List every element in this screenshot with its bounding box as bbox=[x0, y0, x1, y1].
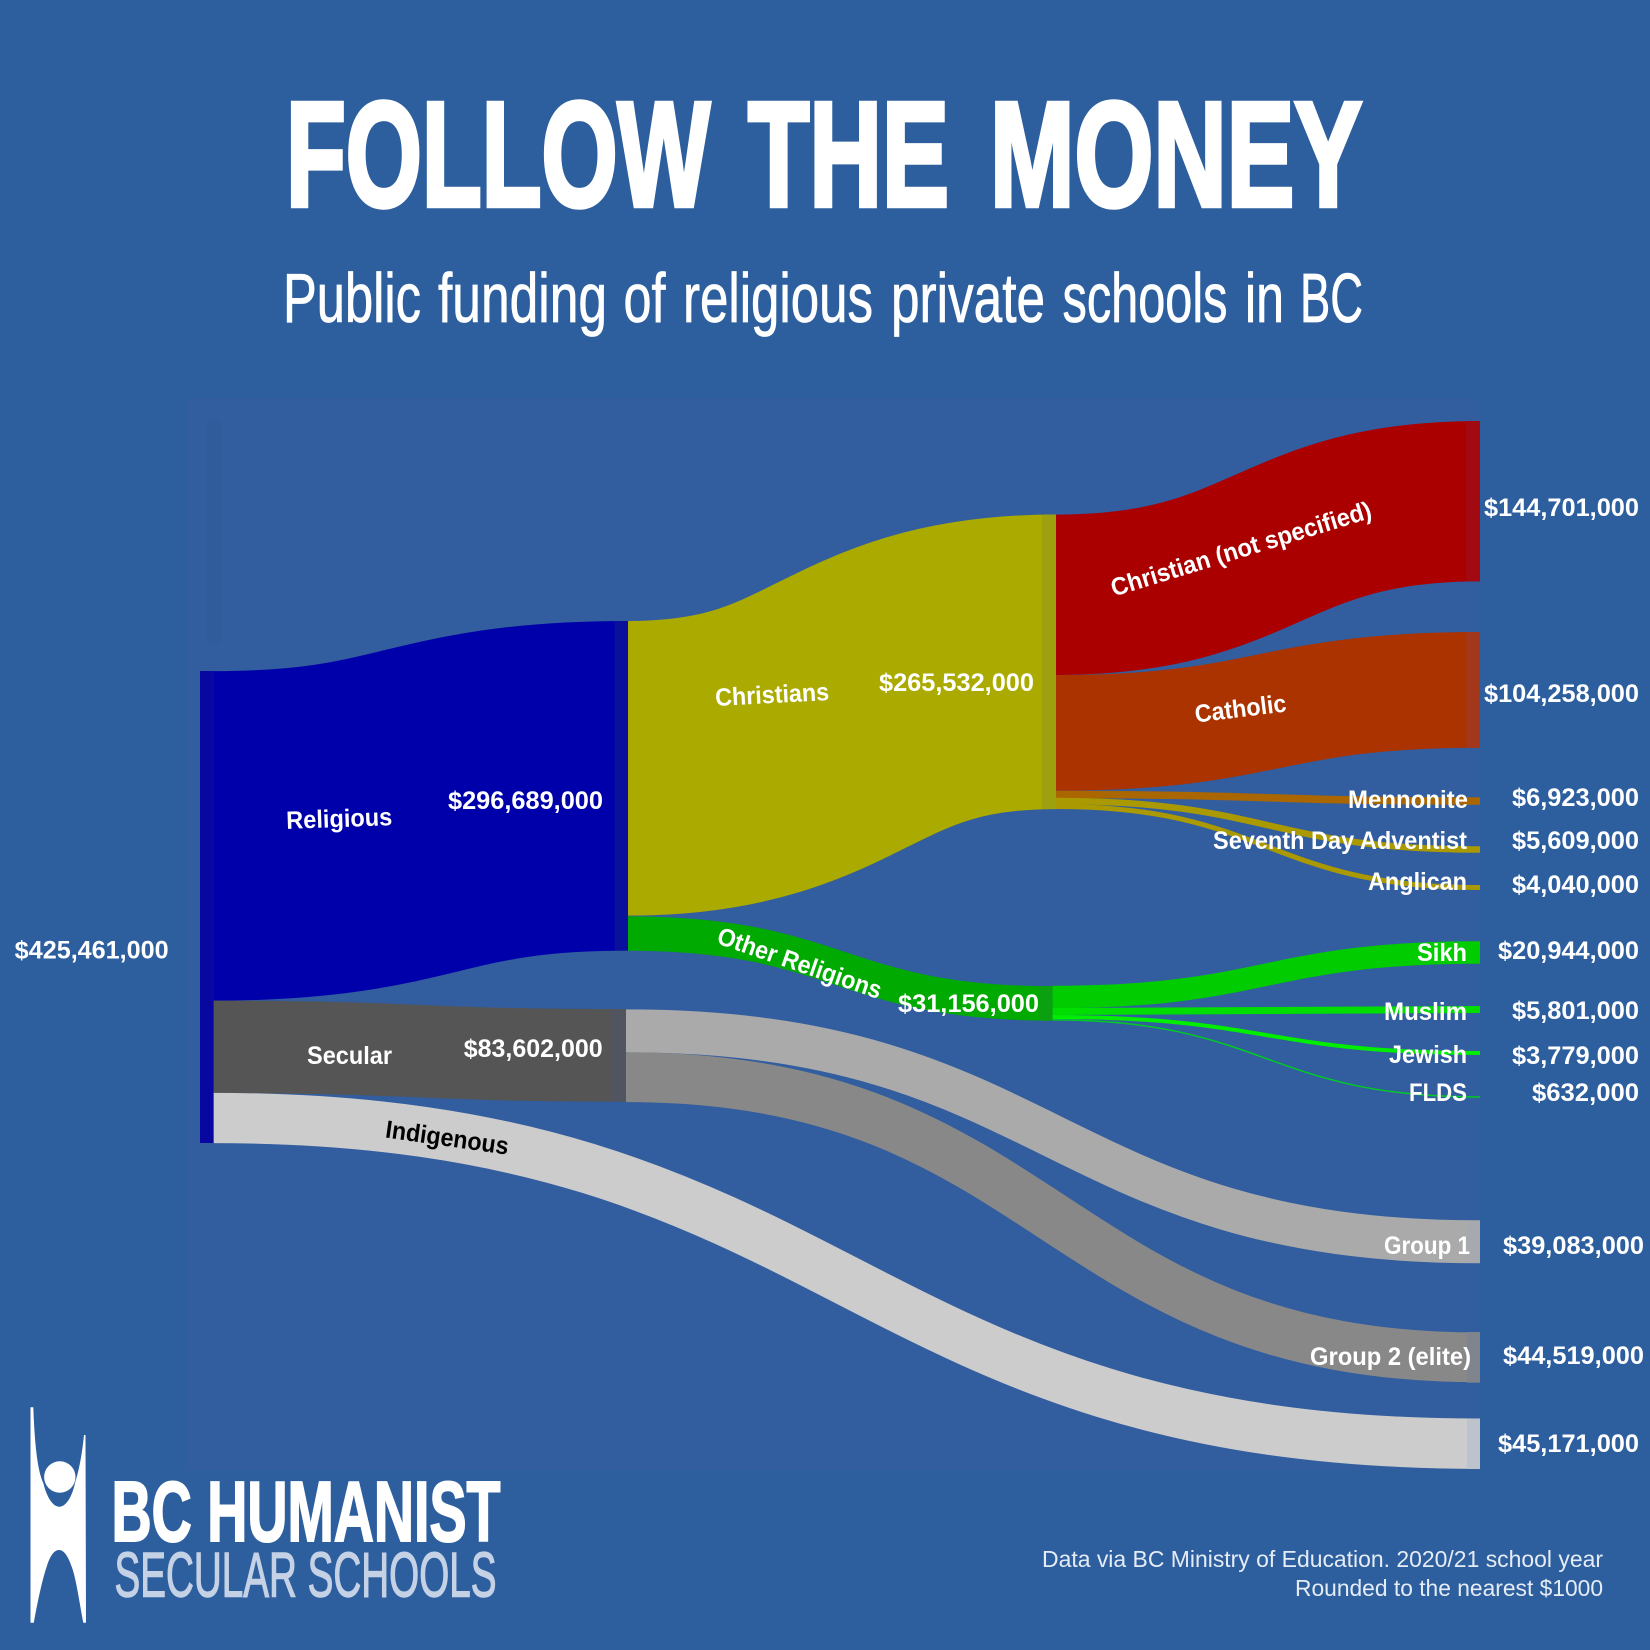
label: muslim: Muslim bbox=[1384, 998, 1467, 1026]
value: mennonite: $6,923,000 bbox=[1512, 784, 1639, 812]
label: sikh: Sikh bbox=[1417, 939, 1467, 967]
source note bbox=[1042, 1546, 1603, 1601]
link: religious bbox=[214, 621, 628, 950]
label: christians: Christians bbox=[714, 678, 830, 712]
label: flds: FLDS bbox=[1409, 1079, 1467, 1107]
link: group 1 bbox=[626, 1031, 1480, 1263]
value: muslim: $5,801,000 bbox=[1512, 997, 1639, 1025]
label: group 2 elite: Group 2 (elite) bbox=[1310, 1343, 1471, 1371]
logo text: secular schools: SECULAR SCHOOLS bbox=[114, 1541, 496, 1611]
link: muslim bbox=[1053, 1010, 1480, 1012]
value: christian not specified: $144,701,000 bbox=[1484, 494, 1639, 522]
link: christians bbox=[628, 515, 1056, 809]
link: anglican bbox=[1056, 806, 1480, 888]
value: secular: $83,602,000 bbox=[464, 1035, 603, 1063]
value: jewish: $3,779,000 bbox=[1512, 1042, 1639, 1070]
subtitle: in bbox=[1245, 259, 1284, 337]
source note: Rounded to the nearest $1000 bbox=[1295, 1575, 1603, 1601]
label: mennonite: Mennonite bbox=[1348, 786, 1468, 814]
link: secular bbox=[214, 1009, 626, 1102]
label: other religions: Other Religions bbox=[714, 922, 885, 1005]
link: other religions bbox=[628, 934, 1053, 1021]
label: catholic: Catholic bbox=[1193, 690, 1288, 729]
value: seventh day adventist: $5,609,000 bbox=[1512, 827, 1639, 855]
source note: Data via BC Ministry of Education. 2020/21 school year bbox=[1042, 1546, 1603, 1572]
value: anglican: $4,040,000 bbox=[1512, 871, 1639, 899]
subtitle: private bbox=[891, 259, 1045, 337]
subtitle: schools bbox=[1062, 259, 1228, 337]
label: anglican: Anglican bbox=[1368, 868, 1467, 896]
value: group 2: $44,519,000 bbox=[1503, 1342, 1644, 1370]
node: total bbox=[200, 671, 214, 1143]
subtitle: religious bbox=[683, 259, 873, 337]
link: seventh day adventist bbox=[1056, 801, 1480, 850]
value: catholic: $104,258,000 bbox=[1484, 680, 1639, 708]
link: catholic bbox=[1056, 632, 1480, 748]
subtitle bbox=[283, 259, 1363, 337]
label: christian not specified: Christian (not specified) bbox=[1107, 496, 1375, 602]
value: indigenous: $45,171,000 bbox=[1498, 1430, 1639, 1458]
label: group 1: Group 1 bbox=[1384, 1232, 1470, 1260]
link: indigenous bbox=[214, 1118, 1480, 1469]
logo: bc humanist secular schools bbox=[30, 1407, 501, 1623]
link: christian not specified bbox=[1056, 421, 1480, 595]
value: group 1: $39,083,000 bbox=[1503, 1232, 1644, 1260]
title: FOLLOW bbox=[286, 71, 710, 238]
subtitle: of bbox=[624, 259, 666, 337]
label: jewish: Jewish bbox=[1389, 1041, 1467, 1069]
label: indigenous: Indigenous bbox=[384, 1116, 510, 1161]
label: secular: Secular bbox=[307, 1042, 392, 1070]
title: THE bbox=[748, 71, 949, 238]
title bbox=[286, 71, 1362, 238]
value: christians: $265,532,000 bbox=[879, 669, 1034, 697]
title: MONEY bbox=[990, 71, 1362, 238]
value: sikh: $20,944,000 bbox=[1498, 937, 1639, 965]
subtitle: Public bbox=[283, 259, 421, 337]
link: sikh bbox=[1053, 952, 1480, 997]
label: religious: Religious bbox=[286, 803, 393, 835]
total amount: $425,461,000 bbox=[15, 937, 169, 965]
link: flds bbox=[1053, 1020, 1480, 1097]
label: seventh day adventist: Seventh Day Adventist bbox=[1213, 827, 1468, 855]
subtitle: funding bbox=[438, 259, 607, 337]
icon: happy human figure bbox=[30, 1407, 86, 1623]
link: group 2 bbox=[626, 1077, 1480, 1383]
link: jewish bbox=[1053, 1017, 1480, 1053]
value: other religions: $31,156,000 bbox=[898, 990, 1039, 1018]
sankey chart bbox=[200, 421, 1480, 1469]
subtitle: BC bbox=[1300, 259, 1363, 337]
value: flds: $632,000 bbox=[1532, 1079, 1639, 1107]
logo text: bc humanist: BC HUMANIST bbox=[112, 1465, 501, 1560]
value: religious: $296,689,000 bbox=[448, 787, 603, 815]
link: mennonite bbox=[1056, 794, 1480, 801]
